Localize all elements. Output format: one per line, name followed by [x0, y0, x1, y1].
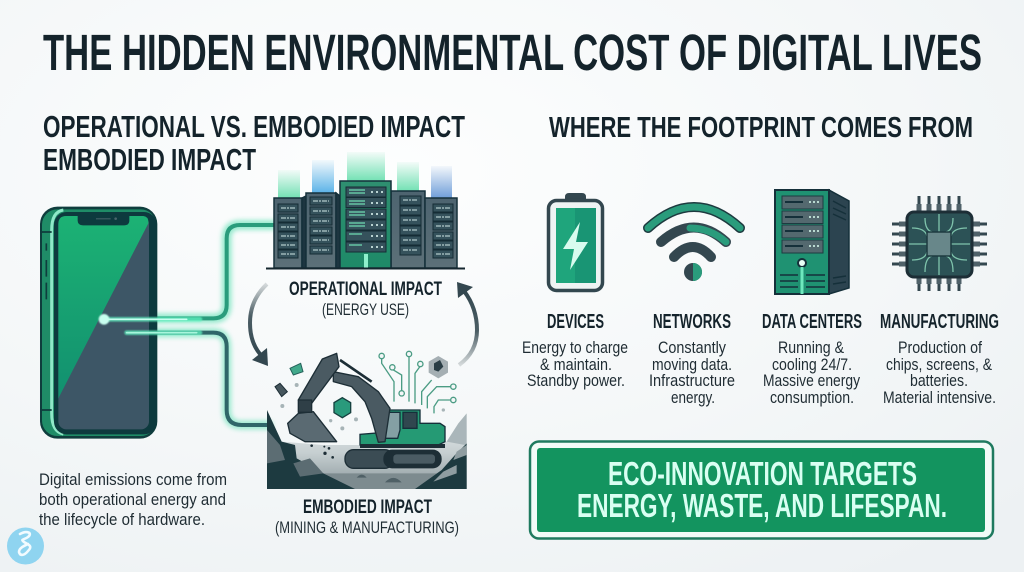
label: operational impact [289, 279, 442, 319]
text: digital emissions note: both operational energy and [39, 490, 226, 509]
column: data centers: cooling 24/7. [772, 355, 852, 374]
watermark logo [7, 528, 44, 564]
icon: server tower [775, 190, 849, 294]
column: data centers: Massive energy [763, 371, 860, 390]
column: devices: Standby power. [527, 371, 625, 390]
callout banner [530, 442, 993, 538]
column: manufacturing: Production of [898, 338, 982, 357]
column: manufacturing: chips, screens, & [886, 355, 993, 374]
column: manufacturing: batteries. [910, 371, 968, 390]
column: networks: energy. [671, 388, 715, 407]
label: embodied impact [275, 497, 459, 537]
terrain [267, 410, 467, 489]
column: data centers: DATA CENTERS [762, 311, 862, 333]
column: networks: Infrastructure [649, 371, 735, 390]
light beams [278, 152, 452, 198]
column: devices: Energy to charge [522, 338, 628, 357]
column: manufacturing [880, 196, 999, 407]
arrow: operational to embodied [250, 284, 268, 366]
icon: battery [548, 193, 602, 290]
icon: ore hexagon [429, 356, 448, 378]
gems and dust [275, 363, 445, 459]
column: networks: Constantly [658, 338, 726, 357]
label: embodied impact: (MINING & MANUFACTURING) [275, 518, 459, 537]
heading: operational vs. embodied impact: EMBODIED IMPACT [43, 142, 256, 177]
icon: wifi [648, 207, 740, 281]
column: manufacturing: Material intensive. [883, 388, 996, 407]
icon: server racks [266, 152, 465, 268]
circuit traces [379, 351, 456, 413]
screen light streaks [99, 314, 200, 333]
excavator tracks [345, 450, 442, 468]
excavator boom and bucket [288, 353, 390, 442]
text: digital emissions note: Digital emissions come from [39, 470, 227, 489]
label: embodied impact: EMBODIED IMPACT [303, 497, 432, 518]
excavator body [360, 410, 445, 448]
column: data centers [762, 190, 862, 407]
label: operational impact: OPERATIONAL IMPACT [289, 279, 442, 300]
illustration: excavator mining scene [267, 351, 467, 489]
column: networks: moving data. [652, 355, 732, 374]
label: operational impact: (ENERGY USE) [322, 300, 409, 319]
connector lines from phone [147, 225, 273, 425]
column: devices [522, 193, 628, 390]
column: data centers: Running & [778, 338, 845, 357]
arrow: embodied to operational [457, 282, 477, 365]
column: networks [648, 207, 740, 407]
icon: smartphone [40, 207, 200, 439]
column: data centers: consumption. [770, 388, 854, 407]
icon: microchip [892, 196, 987, 291]
rack units [278, 187, 453, 258]
column: devices: DEVICES [547, 311, 604, 333]
column: devices: & maintain. [540, 355, 612, 374]
text: digital emissions note: the lifecycle of hardware. [39, 510, 205, 529]
column: networks: NETWORKS [653, 311, 731, 333]
text: digital emissions note [39, 470, 227, 529]
heading: operational vs. embodied impact: OPERATIONAL VS. EMBODIED IMPACT [43, 109, 465, 144]
heading: operational vs. embodied impact [43, 109, 465, 177]
